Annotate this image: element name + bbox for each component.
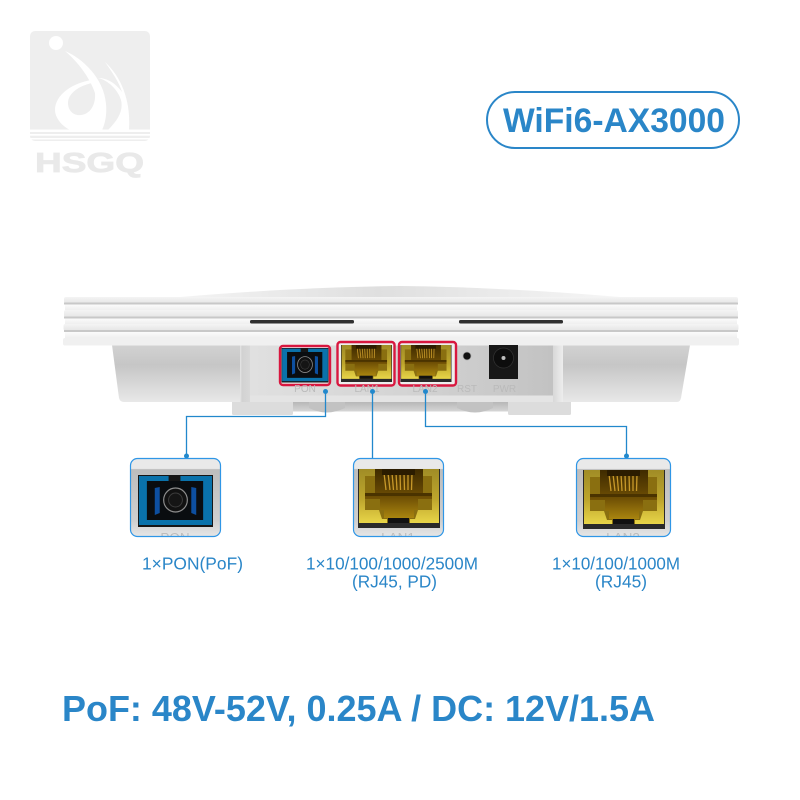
badge: WiFi6-AX3000: WiFi6-AX3000 [503, 102, 725, 140]
connector: LAN2 [423, 389, 629, 458]
card: LAN2 port detail [576, 458, 670, 546]
caption: LAN2: 1×10/100/1000M [552, 554, 680, 574]
power jack [489, 345, 518, 379]
card: PON port detail [130, 458, 220, 546]
badge: WiFi6-AX3000 [487, 92, 739, 148]
caption: LAN1: 1×10/100/1000/2500M [306, 554, 478, 574]
card: PON port detail: PON [160, 530, 190, 546]
logo: HSGQ [30, 31, 150, 178]
center body [250, 345, 553, 396]
slot right [459, 320, 563, 324]
caption: PON: 1×PON(PoF) [142, 554, 243, 574]
caption: LAN1 [306, 554, 478, 592]
port labels: PON [294, 384, 316, 395]
slot left [250, 320, 354, 324]
card: LAN1 port detail [354, 458, 444, 546]
port: LAN2 [399, 342, 456, 386]
caption: LAN2 [552, 554, 680, 592]
port labels [294, 384, 516, 395]
power specification: PoF: 48V-52V, 0.25A / DC: 12V/1.5A [62, 688, 655, 729]
left wing [112, 345, 240, 402]
port: LAN1 [338, 342, 394, 386]
feet and base [232, 400, 571, 415]
card: LAN2 port detail: LAN2 [606, 530, 640, 546]
connector: PON [184, 389, 328, 458]
port labels: RST [457, 384, 477, 395]
port: PON [280, 346, 330, 385]
logo wordmark: HSGQ [35, 147, 144, 178]
top plates [63, 286, 739, 346]
caption: LAN2: (RJ45) [595, 572, 647, 592]
port labels: LAN1 [354, 384, 380, 395]
reset hole [463, 352, 471, 360]
port labels: PWR [493, 384, 516, 395]
right wing [563, 345, 690, 402]
caption: LAN1: (RJ45, PD) [352, 572, 437, 592]
connector: LAN1 [370, 389, 375, 458]
port labels: LAN2 [412, 384, 438, 395]
card: LAN1 port detail: LAN1 [381, 530, 415, 546]
device: router side view [63, 286, 739, 415]
